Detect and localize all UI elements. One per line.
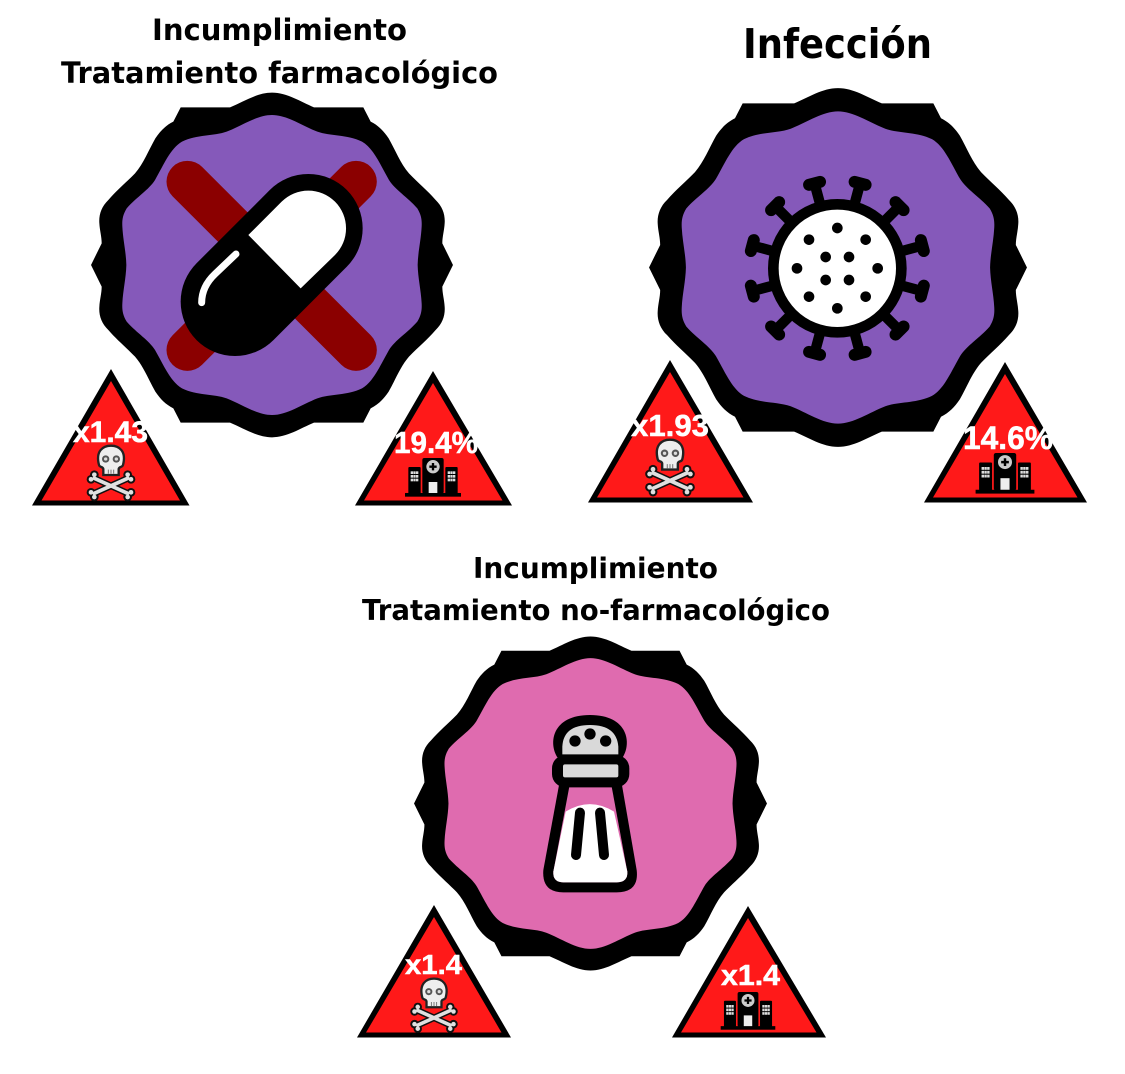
risk triangle: mortality x1.4 [357, 905, 511, 1038]
pill capsule [202, 191, 346, 303]
risk triangle: hospitalization 19.4% [355, 371, 512, 506]
title: incumplimiento tratamiento farmacológico: Tratamiento farmacológico [61, 56, 498, 90]
risk triangle: hospitalization 14.6%: 14.6% [963, 420, 1053, 456]
badge: infection [649, 88, 1027, 447]
dark red cross [187, 182, 356, 350]
risk triangle: mortality x1.43 [32, 369, 190, 506]
risk triangle: mortality x1.4: x1.4 [405, 949, 462, 980]
title: infección: Infección [743, 20, 932, 68]
badge: pharmacological non-adherence [91, 93, 453, 437]
risk triangle: hospitalization 14.6% [924, 362, 1087, 502]
risk triangle: mortality x1.43: x1.43 [73, 416, 148, 449]
risk triangle: mortality x1.93 [588, 360, 753, 502]
icon: crossed-out pill [187, 182, 356, 350]
risk triangle: hospitalization x1.4 [672, 906, 826, 1038]
title: incumplimiento tratamiento farmacológico [61, 13, 498, 90]
icon: salt shaker [543, 715, 637, 892]
title: incumplimiento tratamiento no-farmacológico: Tratamiento no-farmacológico [362, 594, 830, 627]
title: incumplimiento tratamiento no-farmacológico: Incumplimiento [473, 552, 718, 585]
title: incumplimiento tratamiento no-farmacológico [362, 552, 830, 627]
title: incumplimiento tratamiento farmacológico: Incumplimiento [152, 13, 407, 47]
risk triangle: mortality x1.93: x1.93 [631, 408, 709, 443]
badge: non-pharmacological non-adherence [414, 637, 767, 970]
risk triangle: hospitalization x1.4: x1.4 [721, 960, 780, 992]
icon: virus [751, 182, 924, 355]
risk triangle: hospitalization 19.4%: 19.4% [394, 425, 478, 460]
